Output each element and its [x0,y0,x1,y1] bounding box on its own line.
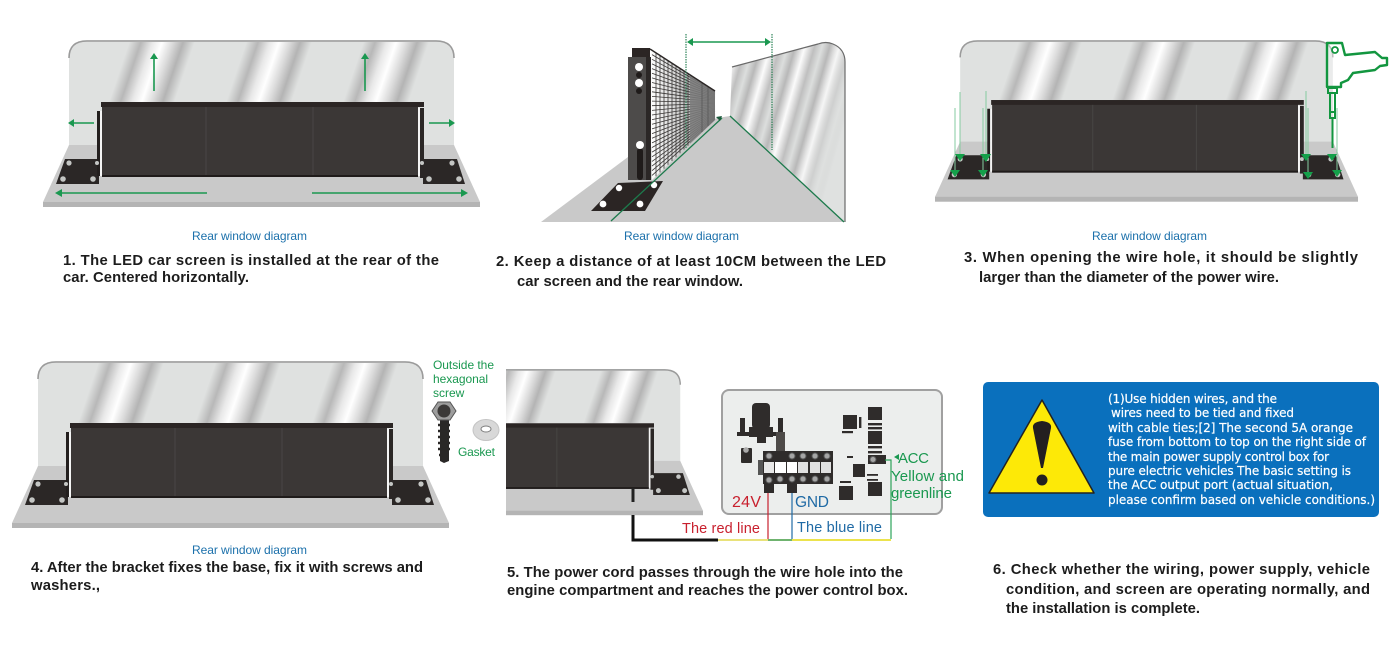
step 3 text: 3. When opening the wire hole, it should be slightly [964,250,1359,266]
label: ACC yellow and green line: greenline [891,485,952,502]
label: gasket: Gasket [458,445,496,459]
step 6 text [993,562,1370,617]
warning text: pure electric vehicles The basic setting is [1108,464,1351,478]
step 6 text: the installation is complete. [1006,601,1200,617]
rear window and LED screen illustration [12,361,449,528]
warning box [983,382,1379,517]
label: the blue line: The blue line [797,520,882,536]
step 2 text [496,254,886,290]
caption: rear window diagram: Rear window diagram [192,543,307,557]
warning text: fuse from bottom to top on the right side of [1108,435,1367,449]
panel: step 4 screws and washers [12,358,499,594]
label: outside hexagonal screw [433,358,494,400]
relay component [737,403,785,463]
step 1 text: 1. The LED car screen is installed at the rear of the [63,253,439,269]
warning text: the ACC output port (actual situation, [1108,478,1333,492]
rear window and LED screen illustration [43,40,480,207]
step 1 text: car. Centered horizontally. [63,270,249,286]
step 2 text: 2. Keep a distance of at least 10CM between the LED [496,254,886,270]
green drill guide arrows [950,91,1342,179]
step 1 text [63,253,439,286]
rear window and LED screen illustration [935,40,1358,202]
warning text: wires need to be tied and fixed [1111,406,1294,420]
warning text: please confirm based on vehicle conditions.) [1108,493,1375,507]
label: 24V: 24V [732,494,761,511]
warning text: the main power supply control box for [1108,450,1329,464]
cropped rear window and screen [506,369,703,516]
caption: rear window diagram: Rear window diagram [1092,229,1207,243]
label: GND: GND [795,494,829,511]
label: ACC yellow and green line: Yellow and [891,468,964,485]
icon: hexagonal screw [432,402,456,463]
floor [541,116,844,222]
fuse block [758,451,833,493]
step 2 text: car screen and the rear window. [517,274,743,290]
green movement arrows [55,53,468,197]
label: outside hexagonal screw: Outside the [433,358,494,372]
step 5 text: 5. The power cord passes through the wire hole into the [507,565,903,581]
panel: step 6 warning and completion [983,382,1379,617]
panel: step 5 wiring diagram [506,369,963,598]
power cord and colored wires [633,460,891,540]
label: the red line: The red line [682,521,760,537]
panel: step 2 side view diagram [496,34,886,290]
side bracket [628,48,651,180]
icon: gasket washer [473,420,499,440]
step 3 text: larger than the diameter of the power wire. [979,270,1279,286]
step 4 text: 4. After the bracket fixes the base, fix it with screws and [31,560,423,576]
label: outside hexagonal screw: screw [433,386,465,400]
rear window in perspective [730,40,846,223]
step 5 text: engine compartment and reaches the power control box. [507,583,908,599]
step 4 text [30,560,423,594]
step 6 text: 6. Check whether the wiring, power supply, vehicle [993,562,1370,578]
power control box [722,390,942,514]
LED mesh screen [650,49,715,180]
icon: warning triangle [989,400,1094,493]
step 4 text: washers., [30,578,100,594]
step 6 text: condition, and screen are operating normally, and [1006,582,1370,598]
green guide lines and distance arrow [611,34,844,222]
warning text: (1)Use hidden wires, and the [1108,392,1277,406]
drill icon [1327,43,1387,148]
panel: step 1 rear window diagram [43,40,480,286]
panel: step 3 wire hole diagram [935,40,1387,286]
label: outside hexagonal screw: hexagonal [433,372,488,386]
caption: rear window diagram: Rear window diagram [624,229,739,243]
label: ACC yellow and green line: ACC [898,450,929,467]
caption: rear window diagram: Rear window diagram [192,229,307,243]
warning text [1108,392,1375,507]
warning text: with cable ties;[2] The second 5A orange [1108,421,1353,435]
step 5 text [507,565,908,599]
step 3 text [964,250,1359,286]
label: ACC yellow and green line [891,450,964,502]
bracket base plate [591,181,663,211]
small fuses and chips [839,407,886,500]
